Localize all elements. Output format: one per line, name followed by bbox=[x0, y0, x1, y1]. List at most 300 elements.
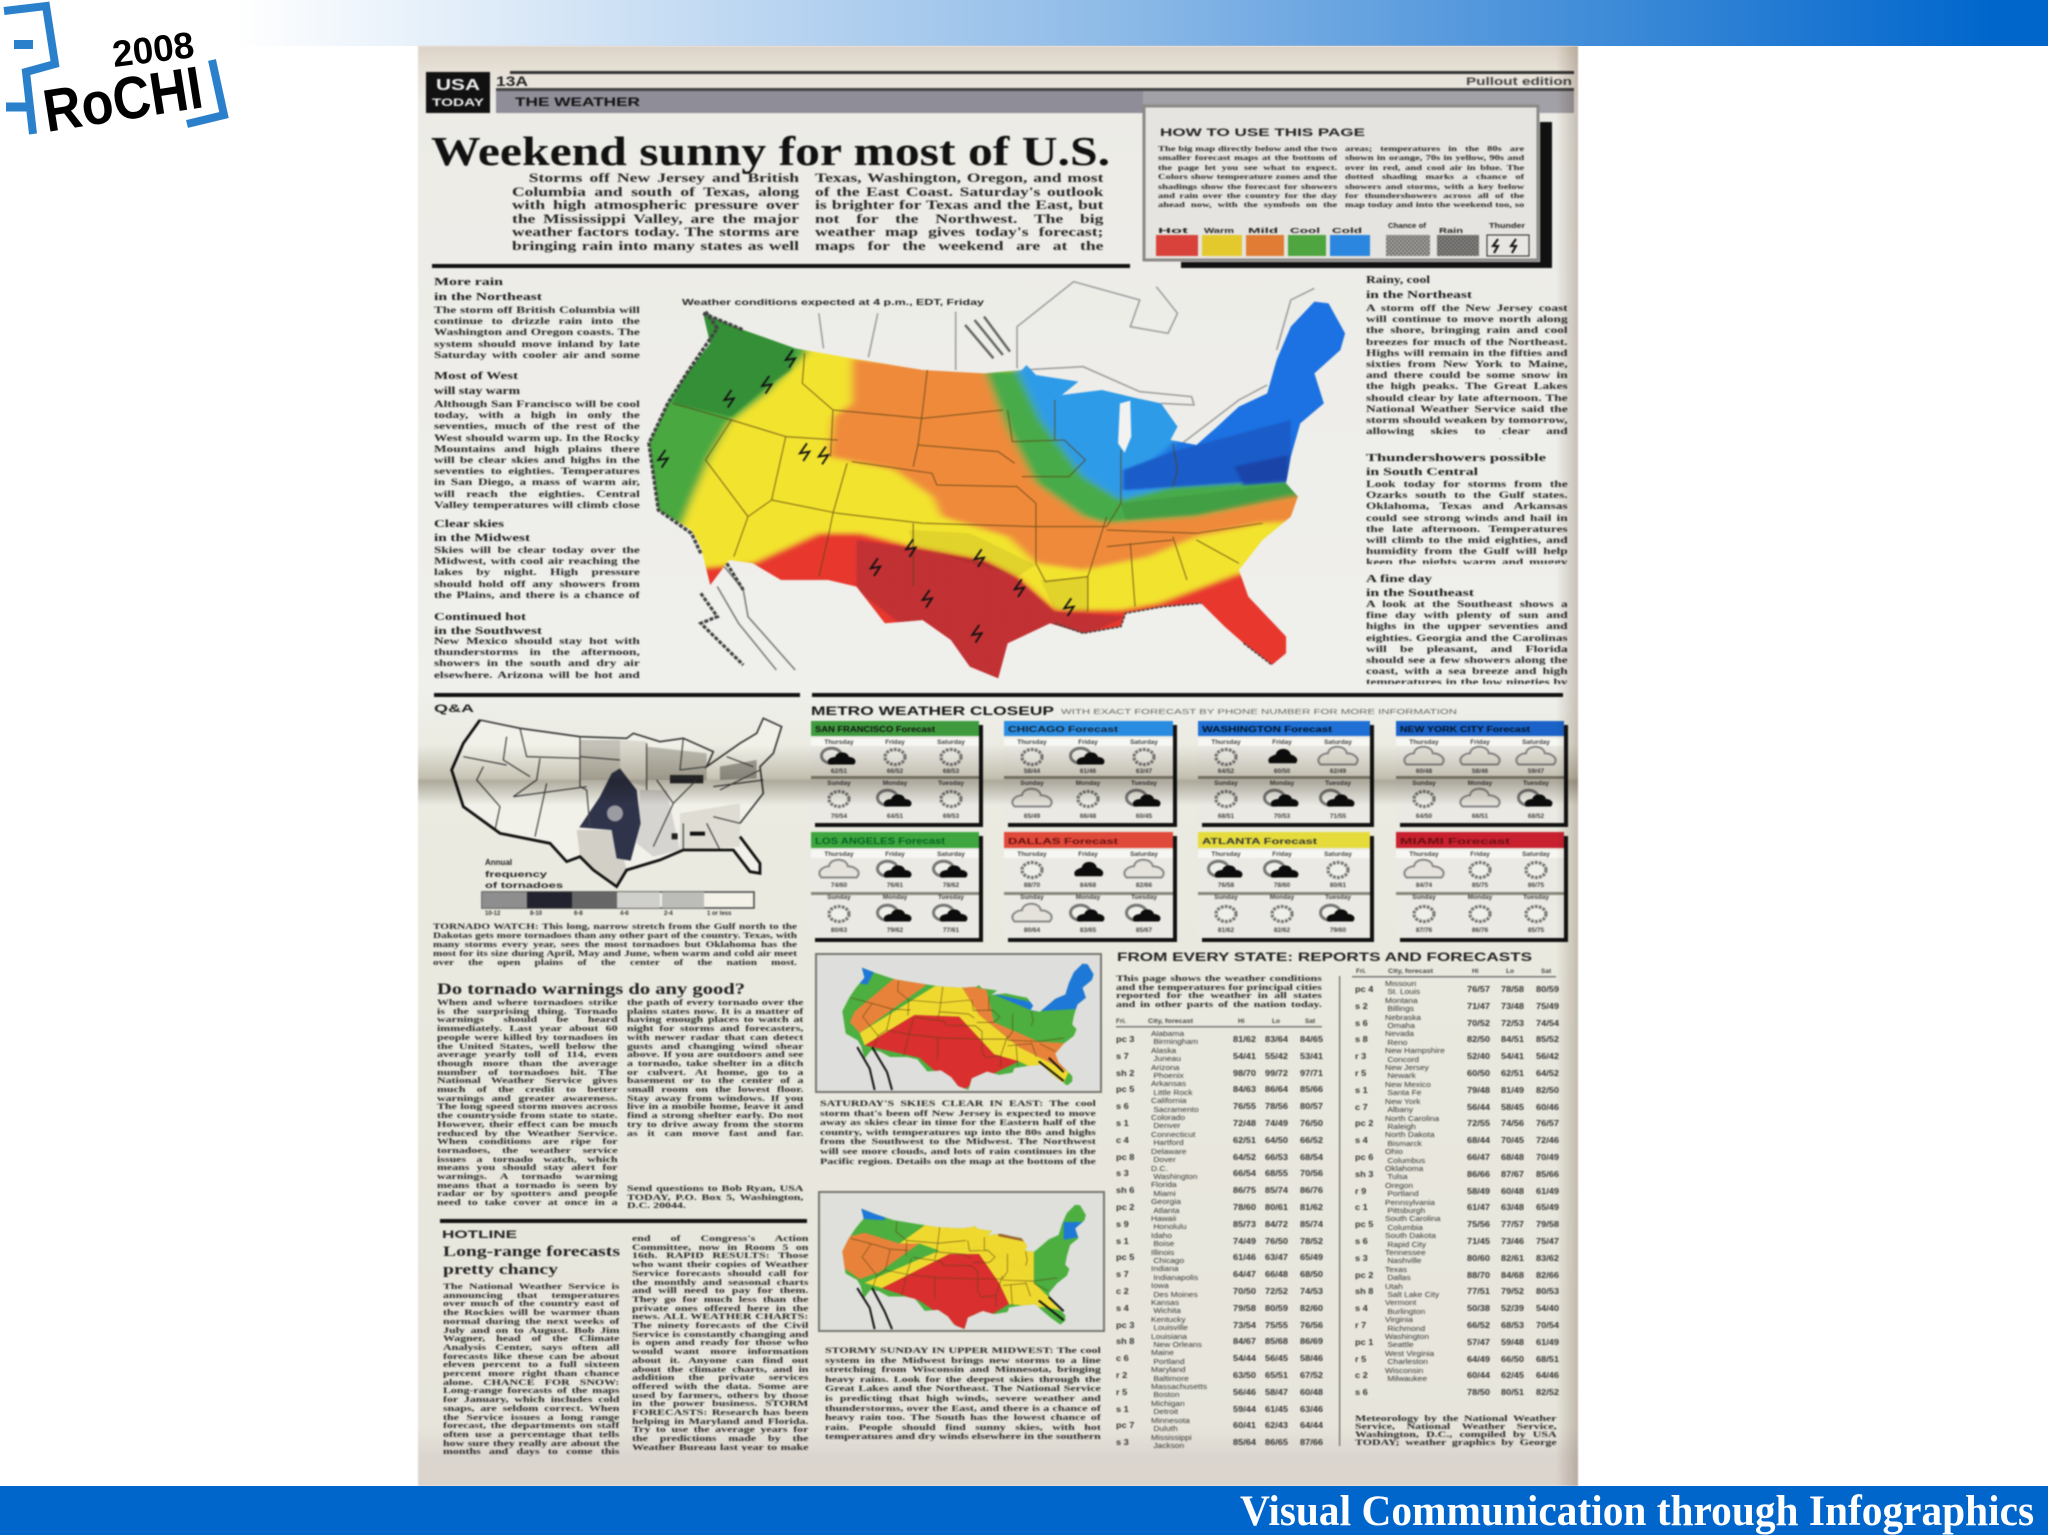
panel: how to use this page: HOW TO USE THIS PAGE bbox=[1160, 127, 1365, 139]
subheads: right column bbox=[1366, 274, 1546, 599]
inset map: Sunday bbox=[819, 1190, 1113, 1340]
state table right: places: Billings bbox=[1387, 1006, 1414, 1013]
state table right: places: Richmond bbox=[1387, 1326, 1425, 1333]
state table right: lows: 52/39 bbox=[1501, 1304, 1524, 1313]
state table right: codes: r 9 bbox=[1355, 1187, 1366, 1196]
state table left: places: Duluth bbox=[1153, 1426, 1178, 1433]
panel: how to use this page bbox=[1144, 106, 1552, 268]
state table right: codes: r 5 bbox=[1355, 1355, 1366, 1364]
metro card: Chicago: Monday bbox=[1076, 780, 1101, 787]
tornado map legend: frequency bbox=[485, 870, 548, 879]
state table right: highs: 88/70 bbox=[1467, 1271, 1490, 1280]
state table left: codes: s 4 bbox=[1116, 1304, 1129, 1313]
state table left: lows: 62/43 bbox=[1265, 1421, 1288, 1430]
metro card: Los Angeles: 80/63 bbox=[831, 927, 848, 934]
state table left: places: Alaska bbox=[1151, 1048, 1176, 1055]
state table right: places: North Carolina bbox=[1385, 1116, 1439, 1122]
state table left: highs: 74/49 bbox=[1233, 1237, 1256, 1246]
state table left: highs: 54/44 bbox=[1233, 1354, 1256, 1363]
state table right: lows: 62/45 bbox=[1501, 1371, 1524, 1380]
tornado watch text: TORNADO WATCH: This long, narrow stretch from the Gulf north to the Dakotas gets more tornadoes than any other part of the country. Texas, with many storms every year, sees the most tornadoes but Oklahoma has the most for its size during April, May and June, when warm and cold air meet over the open plains of the center of the nation most. bbox=[433, 922, 797, 967]
metro card: New York City: NEW YORK CITY Forecast bbox=[1400, 725, 1530, 734]
logo: RoCHI 2008 bbox=[4, 2, 229, 140]
state table right: highs: 60/50 bbox=[1467, 1069, 1490, 1078]
state table right: codes: pc 5 bbox=[1355, 1220, 1373, 1229]
state table right: lows: 87/67 bbox=[1501, 1170, 1524, 1179]
state table right: highs: 71/47 bbox=[1467, 1002, 1490, 1011]
state table left: places: Jackson bbox=[1153, 1443, 1184, 1450]
state table left: lows: 78/56 bbox=[1265, 1102, 1288, 1111]
state table left: places: Connecticut bbox=[1151, 1132, 1195, 1139]
metro card: San Francisco: Friday bbox=[885, 739, 905, 746]
state table left: codes: s 1 bbox=[1116, 1405, 1129, 1414]
state table right: lows: 73/46 bbox=[1501, 1237, 1524, 1246]
state table right: lows: 78/58 bbox=[1501, 985, 1524, 994]
state table right: places: Seattle bbox=[1387, 1342, 1414, 1349]
metro card: Dallas: DALLAS Forecast bbox=[1008, 837, 1119, 846]
state table left: highs: 61/46 bbox=[1233, 1253, 1256, 1262]
state table left: places: New Orleans bbox=[1153, 1342, 1202, 1349]
state table right: places: Columbia bbox=[1387, 1225, 1423, 1232]
metro card: Washington: Friday bbox=[1272, 739, 1292, 746]
state table column headings: Lo bbox=[1272, 1018, 1280, 1025]
metro card: Atlanta: 80/61 bbox=[1330, 882, 1347, 889]
state table right: tomorrow: 75/47 bbox=[1536, 1237, 1559, 1246]
hotline heading: HOTLINE bbox=[442, 1229, 517, 1241]
state table right: lows: 73/48 bbox=[1501, 1002, 1524, 1011]
state table right: lows: 77/57 bbox=[1501, 1220, 1524, 1229]
state table left: places: Miami bbox=[1153, 1191, 1176, 1198]
metro card: Los Angeles: 77/61 bbox=[943, 927, 960, 934]
state table right: codes: sh 8 bbox=[1355, 1287, 1373, 1296]
map caption: Weather conditions expected at 4 p.m., EDT, Friday bbox=[682, 298, 985, 307]
state table right: lows: 70/45 bbox=[1501, 1136, 1524, 1145]
metro card: Chicago: Saturday bbox=[1130, 739, 1158, 746]
state table right: places: Santa Fe bbox=[1387, 1090, 1421, 1097]
state table right: tomorrow: 60/46 bbox=[1536, 1103, 1559, 1112]
metro card: Los Angeles: Friday bbox=[885, 851, 905, 858]
metro weather closeup heading bbox=[811, 704, 1457, 718]
metro card: New York City: 64/50 bbox=[1416, 813, 1433, 820]
subheads: left column: Continued hot bbox=[434, 611, 526, 623]
state table left: tomorrow: 58/46 bbox=[1300, 1354, 1323, 1363]
hotline heading: Long-range forecasts bbox=[443, 1244, 620, 1260]
state table left: places: Wichita bbox=[1153, 1308, 1181, 1315]
state table right: tomorrow: 82/66 bbox=[1536, 1271, 1559, 1280]
state table right: highs: 70/52 bbox=[1467, 1019, 1490, 1028]
state table right: codes: pc 1 bbox=[1355, 1338, 1373, 1347]
Q&A heading: Q&A bbox=[434, 703, 474, 715]
legend: stipple and storm swatches: Chance of bbox=[1388, 223, 1427, 230]
state table right: codes: c 2 bbox=[1355, 1371, 1368, 1380]
state table right: places: Tulsa bbox=[1387, 1174, 1408, 1181]
metro card: Dallas: 80/64 bbox=[1024, 927, 1041, 934]
state table right: places: Albany bbox=[1387, 1107, 1413, 1114]
state table right: tomorrow: 68/51 bbox=[1536, 1355, 1559, 1364]
section rule right bbox=[812, 693, 1563, 697]
metro card: Washington: 60/50 bbox=[1274, 768, 1291, 775]
state table left: tomorrow: 87/66 bbox=[1300, 1438, 1323, 1447]
metro card: Dallas bbox=[1004, 832, 1177, 942]
state table left: places: Portland bbox=[1153, 1359, 1185, 1366]
state table left: places: Boise bbox=[1153, 1241, 1174, 1248]
state table right: places: Newark bbox=[1387, 1073, 1416, 1080]
state table left: places: Kentucky bbox=[1151, 1317, 1186, 1324]
state table left: tomorrow: 81/62 bbox=[1300, 1203, 1323, 1212]
state table right: tomorrow: 80/53 bbox=[1536, 1287, 1559, 1296]
metro card: Atlanta: 78/60 bbox=[1274, 882, 1291, 889]
metro card: Washington: Saturday bbox=[1324, 739, 1352, 746]
state table left: tomorrow: 86/76 bbox=[1300, 1186, 1323, 1195]
state table right: places: St. Louis bbox=[1387, 989, 1420, 996]
state table right: places: Nevada bbox=[1385, 1031, 1414, 1038]
legend: temperature colour swatches: Mild bbox=[1248, 228, 1278, 235]
state table left: lows: 66/48 bbox=[1265, 1270, 1288, 1279]
subheads: right column: A fine day bbox=[1366, 573, 1433, 585]
metro card: Atlanta: ATLANTA Forecast bbox=[1202, 837, 1318, 846]
state table left: places: Massachusetts bbox=[1151, 1384, 1207, 1391]
legend: temperature colour swatches: Cool bbox=[1290, 228, 1320, 235]
state table left: highs bbox=[1232, 1035, 1257, 1447]
state table right: tomorrow: 64/46 bbox=[1536, 1371, 1559, 1380]
state table left: places: Louisiana bbox=[1151, 1334, 1187, 1341]
state table right: highs: 64/49 bbox=[1467, 1355, 1490, 1364]
state table column headings: Sat bbox=[1541, 968, 1552, 975]
metro card: Miami: 87/76 bbox=[1416, 927, 1433, 934]
state table right: places: Nashville bbox=[1387, 1258, 1421, 1265]
state table right: places: Rapid City bbox=[1387, 1242, 1426, 1249]
state table right: places: Bismarck bbox=[1387, 1141, 1422, 1148]
newspaper fold shading bbox=[418, 745, 1578, 805]
state table column headings: Fri. bbox=[1356, 968, 1366, 975]
metro card: Chicago bbox=[1004, 721, 1177, 827]
state table right: places: Dallas bbox=[1387, 1275, 1411, 1282]
state table left: places: Georgia bbox=[1151, 1199, 1181, 1206]
state table right: tomorrow: 76/57 bbox=[1536, 1119, 1559, 1128]
state table right: highs bbox=[1466, 985, 1491, 1397]
state table left: highs: 59/44 bbox=[1233, 1405, 1256, 1414]
state table right: places: Pittsburgh bbox=[1387, 1208, 1425, 1215]
state table right: codes: s 2 bbox=[1355, 1002, 1368, 1011]
metro card: Dallas: 85/67 bbox=[1136, 927, 1153, 934]
metro card: New York City: Friday bbox=[1470, 739, 1490, 746]
state table right: lows: 82/61 bbox=[1501, 1254, 1524, 1263]
state table right: lows: 59/48 bbox=[1501, 1338, 1524, 1347]
subheads: right column: Rainy, cool bbox=[1366, 274, 1430, 286]
state table right: tomorrow: 74/54 bbox=[1536, 1019, 1559, 1028]
state table left: lows bbox=[1264, 1035, 1289, 1447]
state table left: lows: 74/49 bbox=[1265, 1119, 1288, 1128]
metro card: Atlanta: 76/58 bbox=[1218, 882, 1235, 889]
masthead: page number and edition line: Pullout edition bbox=[1466, 76, 1572, 88]
state table right: highs: 61/47 bbox=[1467, 1203, 1490, 1212]
state table right: lows: 80/51 bbox=[1501, 1388, 1524, 1397]
state table left: places: Atlanta bbox=[1153, 1208, 1180, 1215]
state table left: places: Honolulu bbox=[1153, 1224, 1186, 1231]
state table right: places: Burlington bbox=[1387, 1309, 1425, 1316]
metro card: Miami: 86/75 bbox=[1528, 882, 1545, 889]
state table left: tomorrow: 76/56 bbox=[1300, 1321, 1323, 1330]
state table left: tomorrow: 85/74 bbox=[1300, 1220, 1323, 1229]
masthead: page number and edition line bbox=[496, 71, 1574, 89]
Canada outlines and Pacific coast lines bbox=[717, 282, 1314, 670]
state table left: tomorrow: 84/65 bbox=[1300, 1035, 1323, 1044]
state table column headings: Hi bbox=[1472, 968, 1479, 975]
state table left: lows: 86/64 bbox=[1265, 1085, 1288, 1094]
state table left: codes: c 4 bbox=[1116, 1136, 1129, 1145]
state table left: codes: s 7 bbox=[1116, 1270, 1129, 1279]
state table right: codes: s 6 bbox=[1355, 1388, 1368, 1397]
state table right: tomorrow bbox=[1535, 985, 1560, 1397]
metro weather closeup heading: WITH EXACT FORECAST BY PHONE NUMBER FOR MORE INFORMATION bbox=[1061, 709, 1457, 716]
state table left: highs: 85/64 bbox=[1233, 1438, 1256, 1447]
metro card: Washington: Sunday bbox=[1214, 780, 1238, 787]
metro card: Miami: 84/74 bbox=[1416, 882, 1433, 889]
legend: temperature colour swatches: Hot bbox=[1158, 228, 1190, 235]
state table left: tomorrow: 68/54 bbox=[1300, 1153, 1323, 1162]
state table right: tomorrow: 65/49 bbox=[1536, 1203, 1559, 1212]
state table right: highs: 72/55 bbox=[1467, 1119, 1490, 1128]
tornado map legend: 10-12 bbox=[485, 911, 501, 917]
metro card: New York City bbox=[1396, 721, 1568, 827]
state table right: codes: s 6 bbox=[1355, 1237, 1368, 1246]
state table left: places: Juneau bbox=[1153, 1056, 1181, 1063]
metro card: Miami: 85/75 bbox=[1528, 927, 1545, 934]
tornado map legend: of tornadoes bbox=[485, 881, 564, 890]
state table left: highs: 72/48 bbox=[1233, 1119, 1256, 1128]
metro card: Dallas: Sunday bbox=[1020, 894, 1044, 901]
state table right: lows: 66/50 bbox=[1501, 1355, 1524, 1364]
state table left: tomorrow: 66/52 bbox=[1300, 1136, 1323, 1145]
state table right: places: South Carolina bbox=[1385, 1216, 1441, 1223]
metro card: Miami: 85/75 bbox=[1472, 882, 1489, 889]
state table left: highs: 78/60 bbox=[1233, 1203, 1256, 1212]
masthead: USA TODAY nameplate: TODAY bbox=[432, 97, 485, 109]
metro card: Los Angeles bbox=[811, 832, 983, 942]
state table right: highs: 82/50 bbox=[1467, 1035, 1490, 1044]
metro card: Los Angeles: Monday bbox=[883, 894, 908, 901]
state table left: places: Kansas bbox=[1151, 1300, 1179, 1307]
state table left: places bbox=[1150, 1030, 1208, 1450]
subheads: right column: in South Central bbox=[1366, 466, 1478, 478]
state table left: lows: 66/53 bbox=[1265, 1153, 1288, 1162]
state table left: tomorrow: 85/66 bbox=[1300, 1085, 1323, 1094]
state table left: places: Chicago bbox=[1153, 1258, 1184, 1265]
state table left: highs: 60/41 bbox=[1233, 1421, 1256, 1430]
state table left: tomorrow: 67/52 bbox=[1300, 1371, 1323, 1380]
state table left: lows: 85/68 bbox=[1265, 1337, 1288, 1346]
state table left: highs: 85/73 bbox=[1233, 1220, 1256, 1229]
metro card: Dallas: Saturday bbox=[1130, 851, 1158, 858]
state table right: lows: 81/49 bbox=[1501, 1086, 1524, 1095]
subheads: left column: in the Midwest bbox=[434, 532, 530, 544]
legend: temperature colour swatches bbox=[1156, 228, 1370, 256]
metro card: Atlanta bbox=[1198, 832, 1374, 942]
state table left: lows: 80/61 bbox=[1265, 1203, 1288, 1212]
state table left: codes: sh 8 bbox=[1116, 1337, 1134, 1346]
metro card: San Francisco: 69/53 bbox=[943, 813, 960, 820]
newspaper graphics: masthead, maps, cards, tables rules bbox=[424, 70, 1575, 1447]
state table left: tomorrow: 53/41 bbox=[1300, 1052, 1323, 1061]
state table left: highs: 66/54 bbox=[1233, 1169, 1256, 1178]
state table left: highs: 70/50 bbox=[1233, 1287, 1256, 1296]
state table right: highs: 57/47 bbox=[1467, 1338, 1490, 1347]
state table right: places: Montana bbox=[1385, 998, 1418, 1005]
state table left: lows: 63/47 bbox=[1265, 1253, 1288, 1262]
metro card: San Francisco: 62/51 bbox=[831, 768, 848, 775]
subheads: right column: Thundershowers possible bbox=[1366, 452, 1546, 464]
state table left: lows: 64/50 bbox=[1265, 1136, 1288, 1145]
metro card: Miami bbox=[1396, 832, 1568, 942]
metro card: Dallas: 88/70 bbox=[1024, 882, 1041, 889]
metro card: Dallas: Tuesday bbox=[1131, 894, 1157, 901]
tornado map legend: 6-8 bbox=[574, 911, 583, 917]
metro card: Chicago: 63/47 bbox=[1136, 768, 1153, 775]
state table right: codes: r 5 bbox=[1355, 1069, 1366, 1078]
state table left: tomorrow: 97/71 bbox=[1300, 1069, 1323, 1078]
metro card: Chicago: 66/48 bbox=[1080, 813, 1097, 820]
subheads: right column: in the Southeast bbox=[1366, 587, 1474, 599]
state table right: places: Missouri bbox=[1385, 981, 1416, 988]
metro card: New York City: Monday bbox=[1468, 780, 1493, 787]
metro weather closeup heading: METRO WEATHER CLOSEUP bbox=[811, 704, 1054, 718]
metro card: New York City: Thursday bbox=[1409, 739, 1439, 746]
state table right: lows bbox=[1500, 985, 1525, 1397]
state table right: places: North Dakota bbox=[1385, 1132, 1434, 1139]
coastline bbox=[649, 312, 1272, 665]
metro card: Los Angeles: Sunday bbox=[827, 894, 851, 901]
state table left: codes: sh 2 bbox=[1116, 1069, 1134, 1078]
state table left: places: Washington bbox=[1153, 1174, 1197, 1181]
subheads: left column: More rain bbox=[434, 276, 503, 288]
masthead: THE WEATHER section band bbox=[496, 88, 1574, 113]
state table right: tomorrow: 72/46 bbox=[1536, 1136, 1559, 1145]
state table left: highs: 81/62 bbox=[1233, 1035, 1256, 1044]
legend: temperature colour swatches: Cold bbox=[1332, 228, 1362, 235]
state table right: tomorrow: 70/54 bbox=[1536, 1321, 1559, 1330]
state table right: lows: 72/53 bbox=[1501, 1019, 1524, 1028]
state table left: lows: 76/50 bbox=[1265, 1237, 1288, 1246]
legend: stipple and storm swatches: Rain bbox=[1439, 228, 1463, 235]
state table left: tomorrow: 86/69 bbox=[1300, 1337, 1323, 1346]
state table right: highs: 66/52 bbox=[1467, 1321, 1490, 1330]
state table right: places: New Jersey bbox=[1385, 1065, 1429, 1072]
metro card: Miami: Thursday bbox=[1409, 851, 1439, 858]
tornado map legend bbox=[482, 858, 754, 917]
state table right: tomorrow: 79/58 bbox=[1536, 1220, 1559, 1229]
state table right: lows: 58/45 bbox=[1501, 1103, 1524, 1112]
metro card: San Francisco: 70/54 bbox=[831, 813, 848, 820]
metro card: Washington: 62/49 bbox=[1330, 768, 1347, 775]
Lake Michigan bbox=[1118, 401, 1131, 453]
state table right: codes: r 7 bbox=[1355, 1321, 1366, 1330]
state table left: highs: 64/47 bbox=[1233, 1270, 1256, 1279]
panel: scanned newspaper weather page bbox=[418, 46, 1578, 1486]
state table right: lows: 74/56 bbox=[1501, 1119, 1524, 1128]
state table right: places: New Hampshire bbox=[1385, 1048, 1445, 1055]
state table right: codes: s 4 bbox=[1355, 1136, 1368, 1145]
state table left: places: Iowa bbox=[1151, 1283, 1169, 1290]
state table left: tomorrow: 82/60 bbox=[1300, 1304, 1323, 1313]
state table left: lows: 55/42 bbox=[1265, 1052, 1288, 1061]
state table right: lows: 79/52 bbox=[1501, 1287, 1524, 1296]
state table right: codes: s 6 bbox=[1355, 1019, 1368, 1028]
state table right: tomorrow: 61/49 bbox=[1536, 1338, 1559, 1347]
thunderstorm bolt symbols bbox=[658, 350, 1074, 643]
state table right: codes: r 3 bbox=[1355, 1052, 1366, 1061]
state table right: places bbox=[1384, 980, 1446, 1383]
main weather map of the United States bbox=[646, 280, 1346, 679]
tornado map legend: 2-4 bbox=[664, 911, 673, 917]
state table right: places: Concord bbox=[1387, 1057, 1419, 1064]
state table right: tomorrow: 61/49 bbox=[1536, 1187, 1559, 1196]
metro card: Dallas: 83/65 bbox=[1080, 927, 1097, 934]
metro card: Chicago: CHICAGO Forecast bbox=[1008, 725, 1118, 734]
metro card: Chicago: 65/49 bbox=[1024, 813, 1041, 820]
state table right: codes: pc 2 bbox=[1355, 1271, 1373, 1280]
state table right: places: Reno bbox=[1387, 1040, 1407, 1047]
top gradient bar bbox=[235, 0, 2048, 46]
state table right: tomorrow: 64/52 bbox=[1536, 1069, 1559, 1078]
state table left: places: Illinois bbox=[1151, 1250, 1174, 1257]
metro card: Dallas: 82/66 bbox=[1136, 882, 1153, 889]
state table left: lows: 80/59 bbox=[1265, 1304, 1288, 1313]
state table right: codes: s 4 bbox=[1355, 1304, 1368, 1313]
tornado map legend: 4-6 bbox=[620, 911, 629, 917]
state table column headings: Lo bbox=[1506, 968, 1514, 975]
state table left: codes: r 5 bbox=[1116, 1388, 1127, 1397]
metro card: San Francisco: Thursday bbox=[824, 739, 854, 746]
metro card: Washington: Monday bbox=[1270, 780, 1295, 787]
metro card: Los Angeles: 78/62 bbox=[943, 882, 960, 889]
metro card: Washington bbox=[1198, 721, 1374, 827]
state table left: codes: pc 8 bbox=[1116, 1153, 1134, 1162]
subheads: left column: will stay warm bbox=[434, 385, 520, 397]
state table left: places: Boston bbox=[1153, 1392, 1180, 1399]
state table left: codes: s 1 bbox=[1116, 1237, 1129, 1246]
state table right: places: Virginia bbox=[1385, 1317, 1413, 1324]
metro card: Dallas: 84/68 bbox=[1080, 882, 1097, 889]
state table right: highs: 52/40 bbox=[1467, 1052, 1490, 1061]
state table left: highs: 62/51 bbox=[1233, 1136, 1256, 1145]
state table left: places: Little Rock bbox=[1153, 1090, 1193, 1097]
state table left: places: Phoenix bbox=[1153, 1073, 1184, 1080]
state table left: places: D.C. bbox=[1151, 1166, 1168, 1172]
state table right: codes: s 3 bbox=[1355, 1254, 1368, 1263]
state table left: tomorrow: 78/52 bbox=[1300, 1237, 1323, 1246]
masthead: USA TODAY nameplate bbox=[426, 72, 490, 113]
state table right: places: Wisconsin bbox=[1385, 1368, 1423, 1375]
state table right: codes: sh 3 bbox=[1355, 1170, 1373, 1179]
state table left: places: Des Moines bbox=[1153, 1292, 1198, 1299]
state table left: tomorrow: 68/50 bbox=[1300, 1270, 1323, 1279]
state table left: lows: 61/45 bbox=[1265, 1405, 1288, 1414]
state table right: places: Omaha bbox=[1387, 1023, 1415, 1030]
metro card: San Francisco: Monday bbox=[883, 780, 908, 787]
state table left: highs: 76/55 bbox=[1233, 1102, 1256, 1111]
state table right: places: Utah bbox=[1385, 1284, 1403, 1291]
state table left: places: Maine bbox=[1151, 1350, 1174, 1357]
state table right: codes: s 8 bbox=[1355, 1035, 1368, 1044]
section heading: Do tornado warnings do any good?: Do tornado warnings do any good? bbox=[437, 981, 745, 998]
state table right: tomorrow: 82/52 bbox=[1536, 1388, 1559, 1397]
state table right: highs: 77/51 bbox=[1467, 1287, 1490, 1296]
state table left: tomorrow: 64/44 bbox=[1300, 1421, 1323, 1430]
state table right: codes bbox=[1354, 985, 1374, 1397]
metro card: Chicago: Sunday bbox=[1020, 780, 1044, 787]
rule under intro bbox=[432, 264, 1130, 268]
state table left: lows: 86/65 bbox=[1265, 1438, 1288, 1447]
